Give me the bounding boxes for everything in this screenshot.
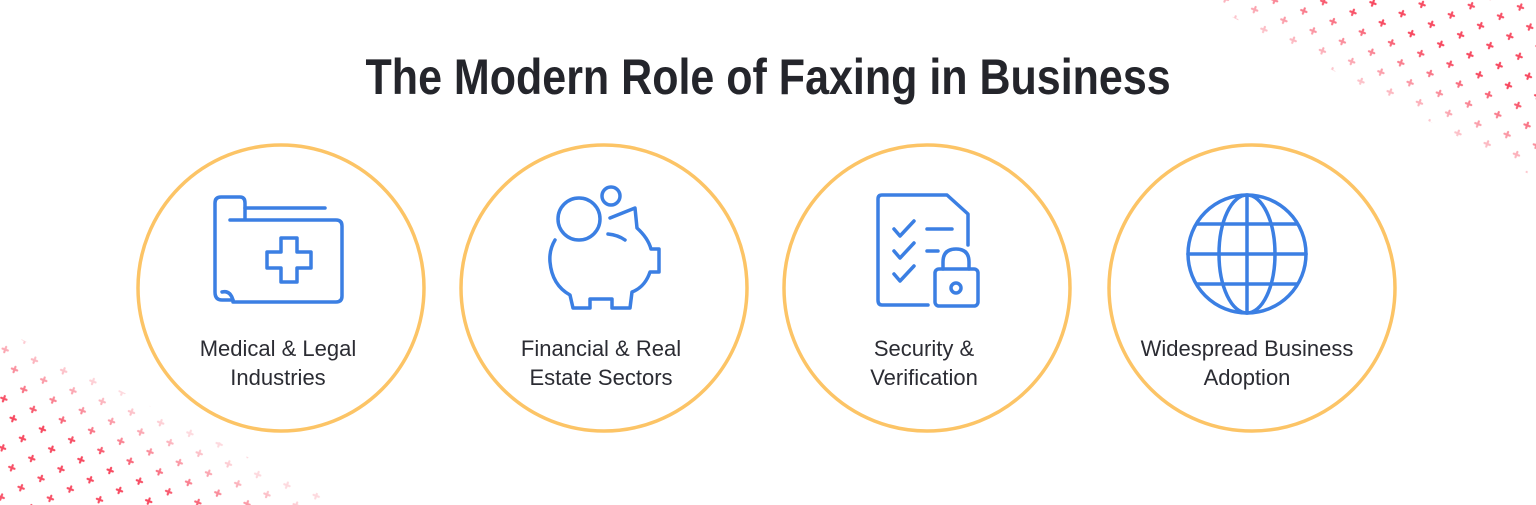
label: medical: Industries <box>230 365 326 390</box>
label: security: Security & <box>874 336 974 361</box>
label: adoption: Adoption <box>1204 365 1290 390</box>
icon: secure document <box>878 195 978 306</box>
circle 3 <box>784 145 1070 431</box>
label: adoption: Widespread Business <box>1141 336 1353 361</box>
label: security: Verification <box>870 365 978 390</box>
title: The Modern Role of Faxing in Business <box>365 49 1171 105</box>
circle 1 <box>138 145 424 431</box>
label: medical <box>200 336 356 390</box>
label: medical: Medical & Legal <box>200 336 356 361</box>
label: financial <box>521 336 681 390</box>
circle 2 <box>461 145 747 431</box>
icon: piggy bank <box>550 187 659 308</box>
circle 4 <box>1109 145 1395 431</box>
label: financial: Estate Sectors <box>529 365 673 390</box>
icon: medical folder <box>215 197 342 302</box>
label: financial: Financial & Real <box>521 336 681 361</box>
label: adoption <box>1140 336 1353 390</box>
label: security <box>870 336 978 390</box>
icon: globe <box>1188 195 1306 313</box>
